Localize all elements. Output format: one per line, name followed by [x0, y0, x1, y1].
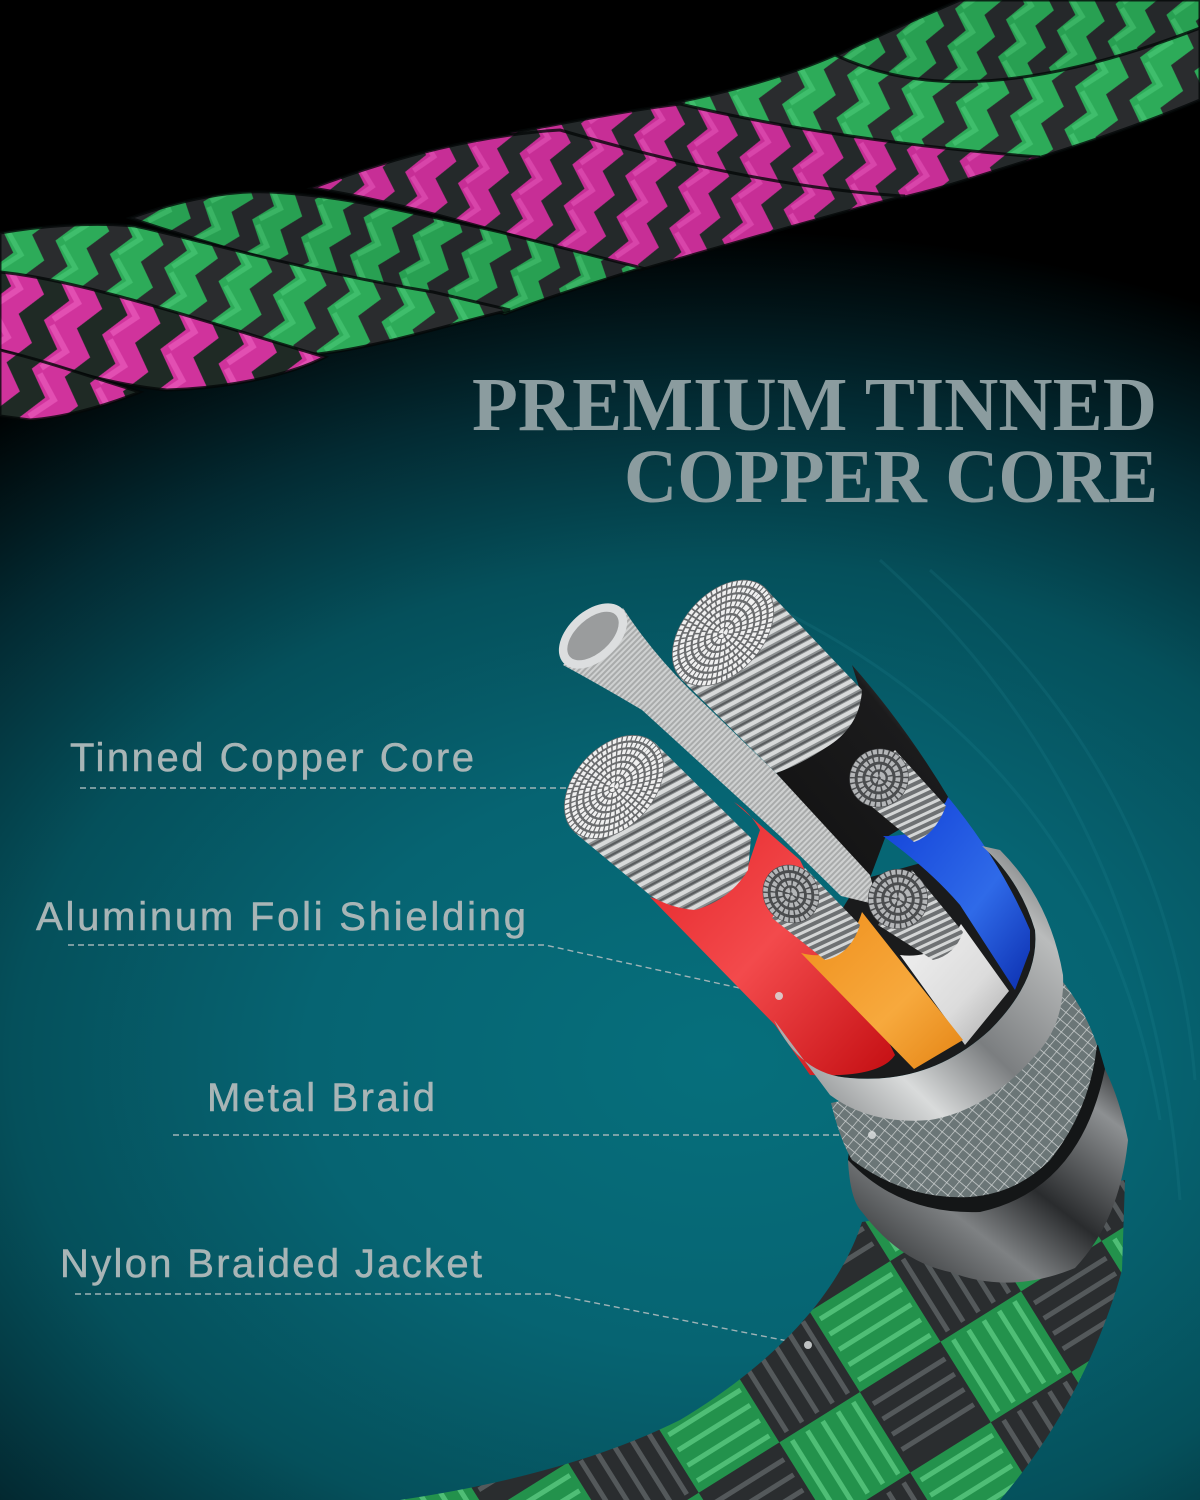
strand: lower left magenta [0, 272, 325, 390]
strand: bottom left magenta [0, 350, 140, 420]
grey tube wire [563, 608, 878, 905]
strand: upper magenta [510, 104, 1040, 198]
opening interior [774, 846, 1035, 1079]
white wire [900, 924, 1009, 1045]
strand: left green [0, 224, 510, 354]
silver ring [774, 846, 1063, 1121]
collar top edge [848, 1045, 1105, 1212]
strand: upper left green [130, 192, 642, 314]
strand on blue wire [838, 737, 946, 842]
red wire [650, 802, 895, 1075]
label: Nylon Braided Jacket: Nylon Braided Jacket [60, 1242, 482, 1286]
orange wire [801, 912, 963, 1069]
leader dots [775, 992, 876, 1349]
upper tinned copper strand [652, 560, 862, 773]
big nylon braided jacket [400, 1180, 1125, 1500]
blue wire [883, 797, 1030, 990]
title: COPPER CORE [624, 435, 1158, 519]
metal braid mesh [831, 982, 1097, 1197]
strand: middle magenta [312, 130, 905, 270]
twisted braided cable [0, 0, 1200, 420]
label: Nylon Braided Jacket [60, 1242, 808, 1345]
cable cutaway [544, 560, 1128, 1349]
label: Tinned Copper Core: Tinned Copper Core [70, 736, 474, 780]
label: Metal Braid: Metal Braid [207, 1076, 435, 1120]
strand on white wire [856, 857, 963, 960]
label: Aluminum Foil Shielding [36, 895, 780, 997]
lower tinned copper strand [544, 716, 751, 910]
tube opening [547, 591, 639, 681]
dark metal collar [848, 1069, 1128, 1283]
title: PREMIUM TINNED [472, 363, 1157, 447]
title [472, 363, 1158, 519]
strand: right green [668, 28, 1200, 158]
label: Aluminum Foil Shielding: Aluminum Foli Shielding [36, 895, 526, 939]
black insulated wire [776, 665, 950, 878]
strand: upper right green [830, 0, 1200, 112]
strand on orange wire [751, 854, 860, 960]
